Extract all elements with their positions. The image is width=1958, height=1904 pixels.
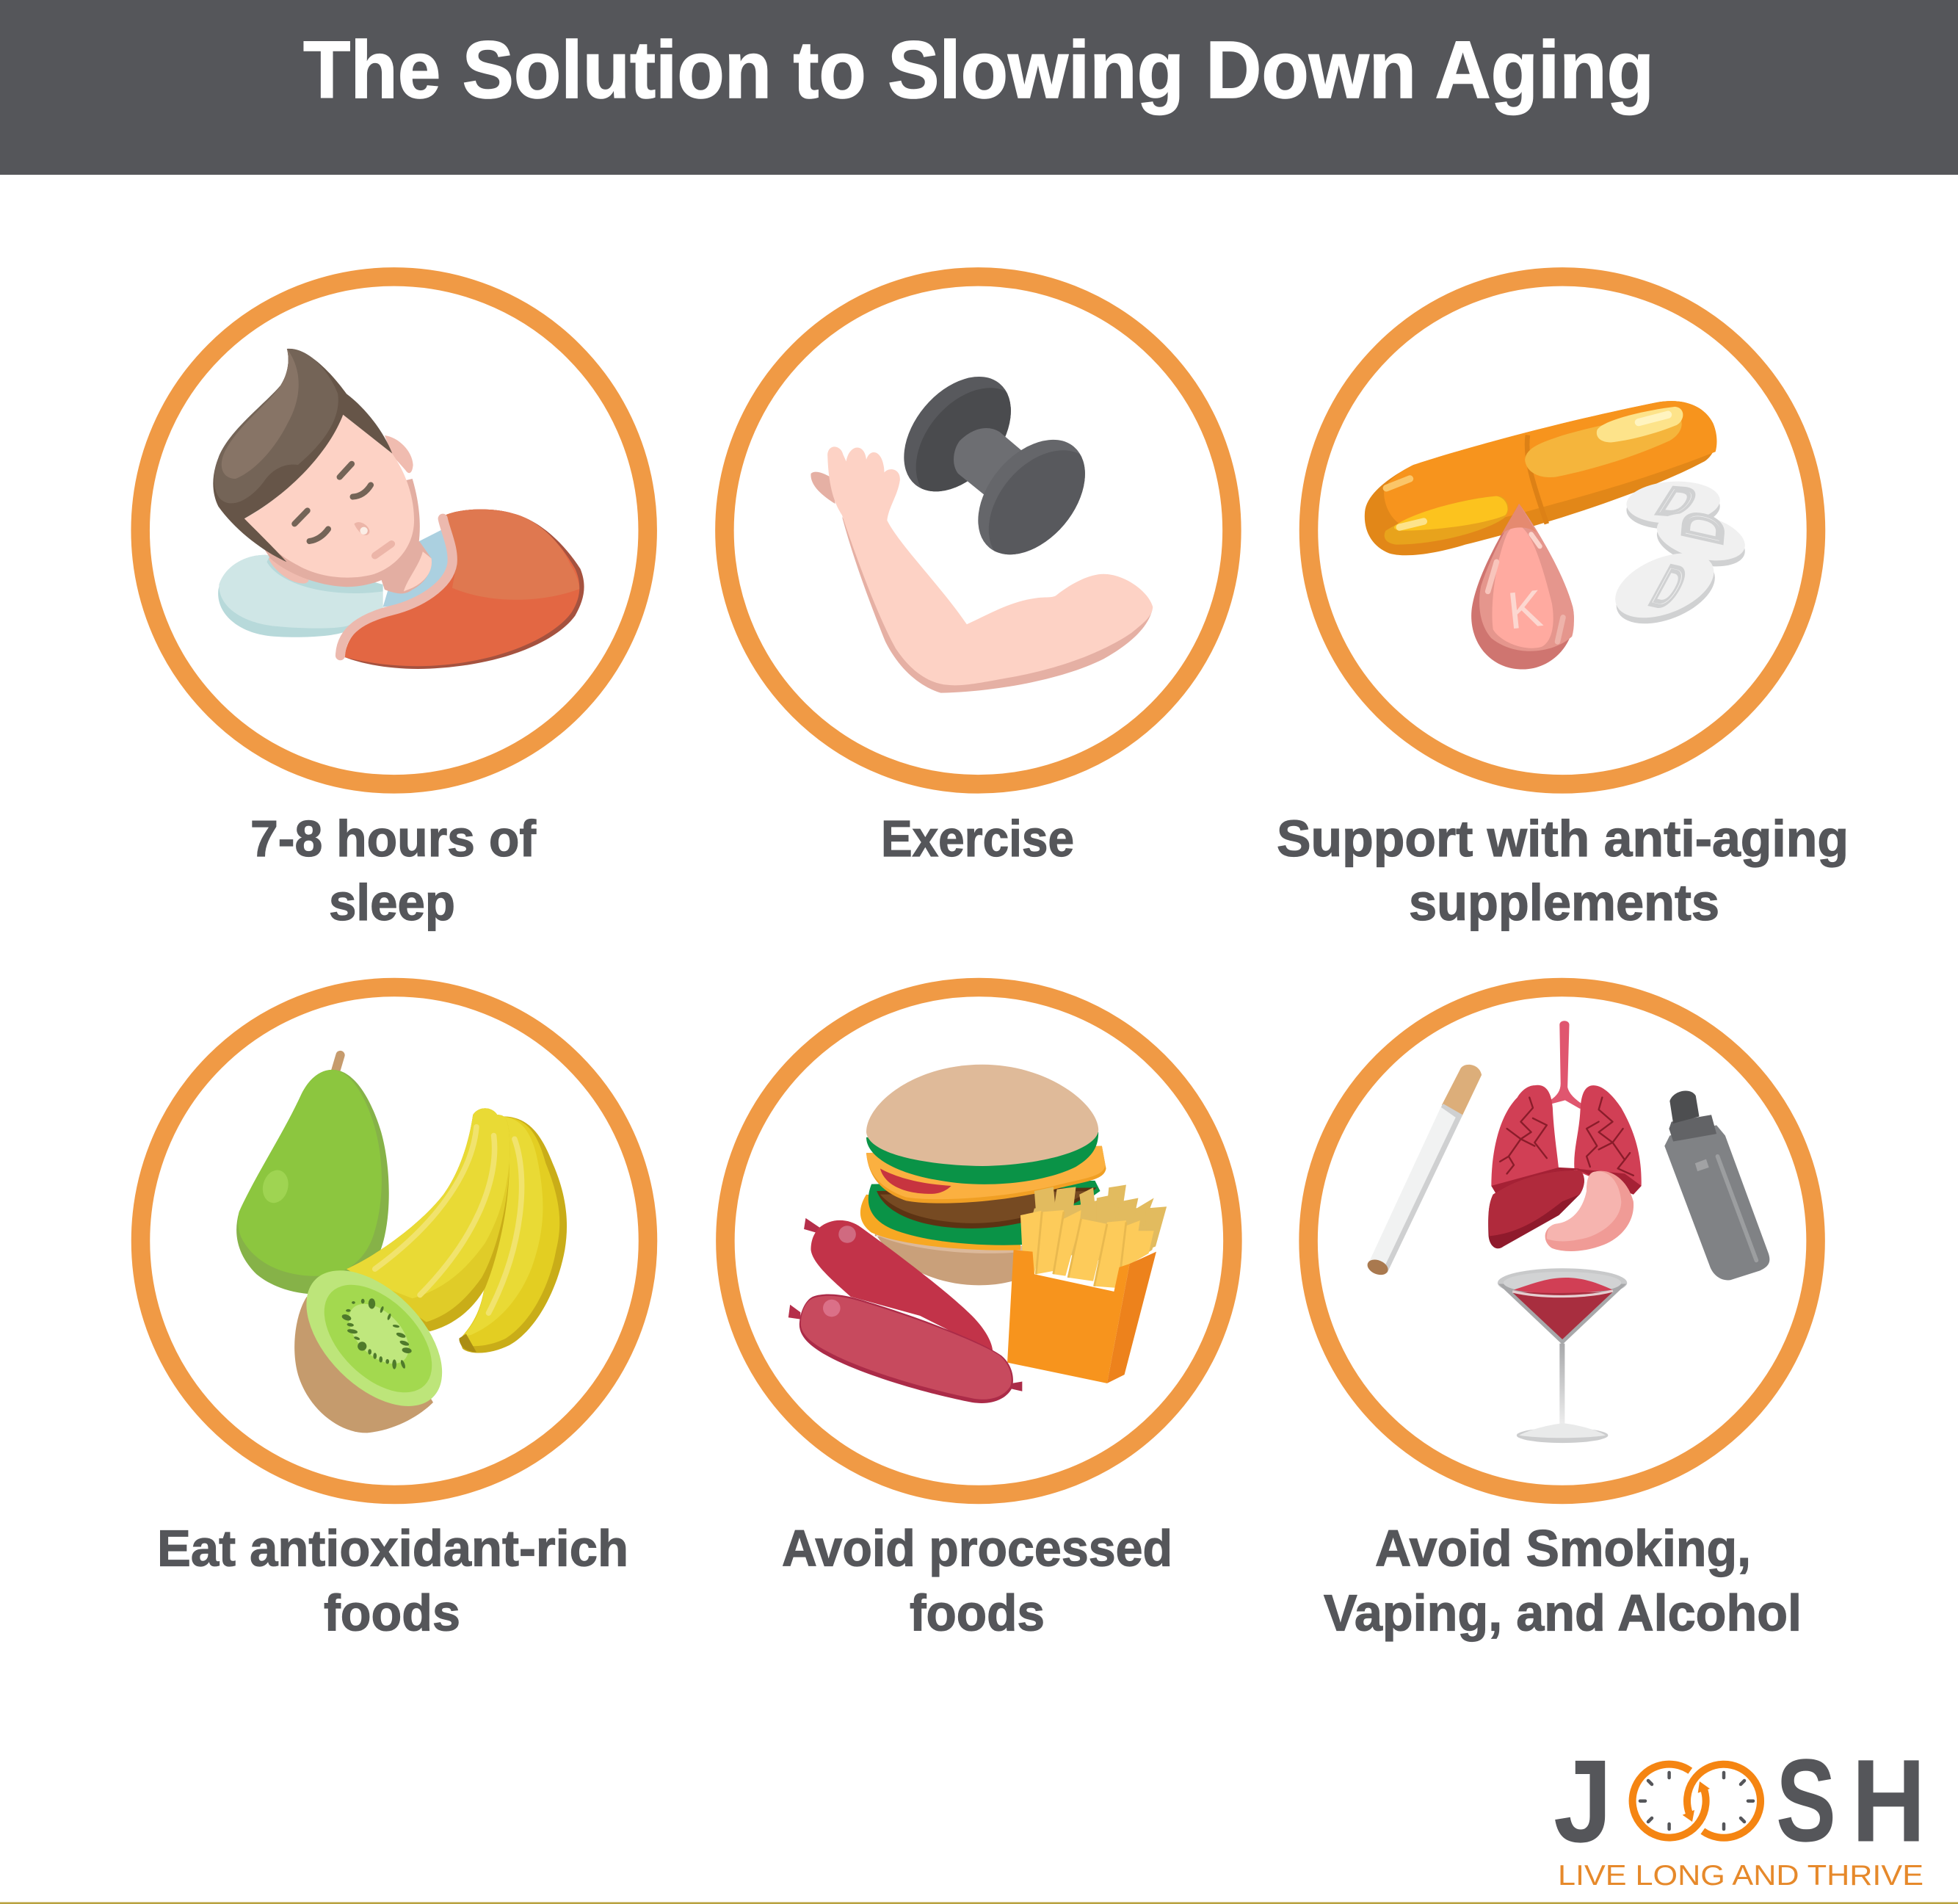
panel: sleep: [140, 277, 648, 931]
icon: capsule, drop and tablets: [1365, 401, 1749, 670]
panel: exercise: [725, 277, 1232, 867]
logo: JOOSH: [1553, 1734, 1926, 1892]
letter D on tablet: D: [1672, 507, 1736, 549]
icon: pear, bananas and kiwi: [236, 1055, 567, 1433]
letter D on tablet: D: [1648, 479, 1706, 524]
panel: supplements: [1277, 277, 1849, 931]
panel: antioxidant foods: [141, 987, 648, 1642]
label: supplements: Support with anti-aging: [1277, 810, 1849, 867]
icon: sleeping man: [213, 349, 584, 669]
title: The Solution to Slowing Down Aging: [303, 25, 1654, 115]
ring: [140, 277, 648, 784]
logo letter J: J: [1553, 1735, 1612, 1867]
label: processed foods: Avoid processed: [782, 1520, 1172, 1577]
logo tagline: LIVE LONG AND THRIVE: [1558, 1860, 1923, 1892]
ring: [1308, 987, 1816, 1495]
panel: processed foods: [725, 987, 1233, 1642]
label: sleep: [250, 810, 537, 931]
ring: [725, 277, 1232, 784]
icon: burger, fries and sausages: [788, 1065, 1167, 1403]
label: supplements: supplements: [1409, 874, 1719, 931]
icon: arm and dumbbell: [811, 356, 1153, 693]
label: smoking, vaping, alcohol: Vaping, and Alcohol: [1324, 1585, 1802, 1642]
letter K: K: [1505, 579, 1545, 640]
label: sleep: sleep: [329, 874, 455, 931]
label: processed foods: [782, 1520, 1172, 1642]
header banner: [0, 0, 1958, 175]
label: antioxidant foods: foods: [324, 1585, 460, 1642]
label: supplements: [1277, 810, 1849, 931]
ring: [725, 987, 1233, 1495]
label: smoking, vaping, alcohol: Avoid Smoking,: [1375, 1520, 1751, 1577]
label: exercise: Exercise: [881, 810, 1074, 867]
ring: [1308, 277, 1816, 784]
label: smoking, vaping, alcohol: [1324, 1520, 1802, 1642]
icon: cigarette, organs, vape and martini: [1365, 1021, 1769, 1443]
logo letter S: S: [1776, 1734, 1836, 1866]
label: processed foods: foods: [910, 1585, 1045, 1642]
label: antioxidant foods: Eat antioxidant-rich: [157, 1520, 628, 1577]
logo: interlocked clocks: [1633, 1764, 1761, 1838]
label: antioxidant foods: [157, 1520, 628, 1642]
logo letter H: H: [1852, 1734, 1926, 1867]
ring: [141, 987, 648, 1495]
letter D on tablet: D: [1641, 554, 1697, 620]
panel: smoking, vaping, alcohol: [1308, 987, 1816, 1642]
label: sleep: 7-8 hours of: [250, 810, 537, 867]
